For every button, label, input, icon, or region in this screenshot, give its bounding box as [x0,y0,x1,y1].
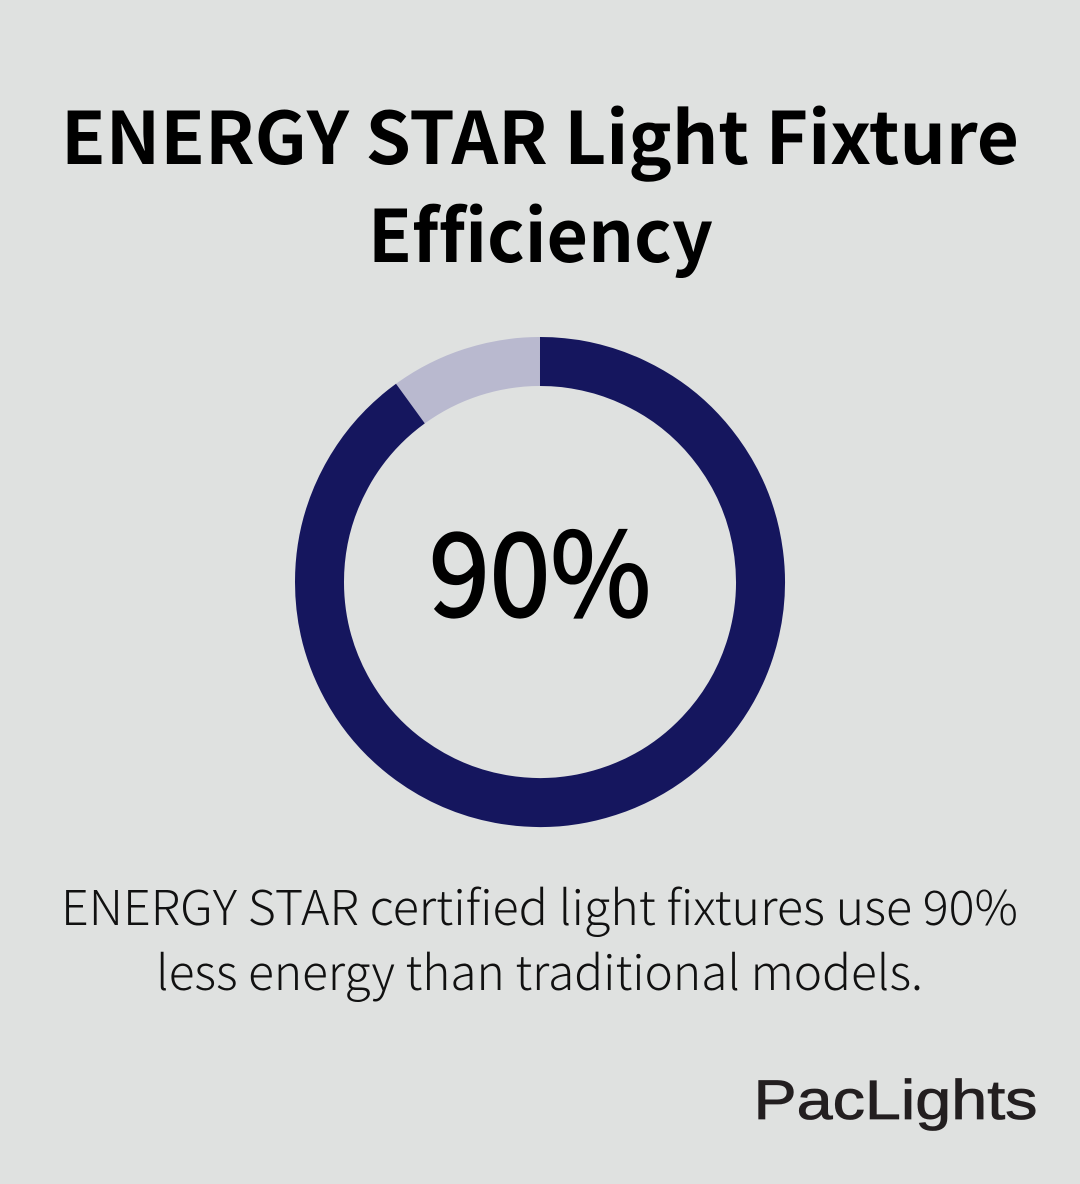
description [61,869,1018,1004]
center value: 90% [429,484,651,650]
title: ENERGY STAR Light Fixture [61,80,1019,185]
donut chart: 90 percent [319,362,760,802]
description: ENERGY STAR certified light fixtures use 90% [61,869,1018,939]
title: Efficiency [368,178,713,283]
title [61,80,1019,283]
90 percent segment [319,362,760,802]
description: less energy than traditional models. [156,934,923,1004]
logo: PacLights: PacLights [754,1068,1038,1131]
remaining 10 percent segment [410,362,540,404]
